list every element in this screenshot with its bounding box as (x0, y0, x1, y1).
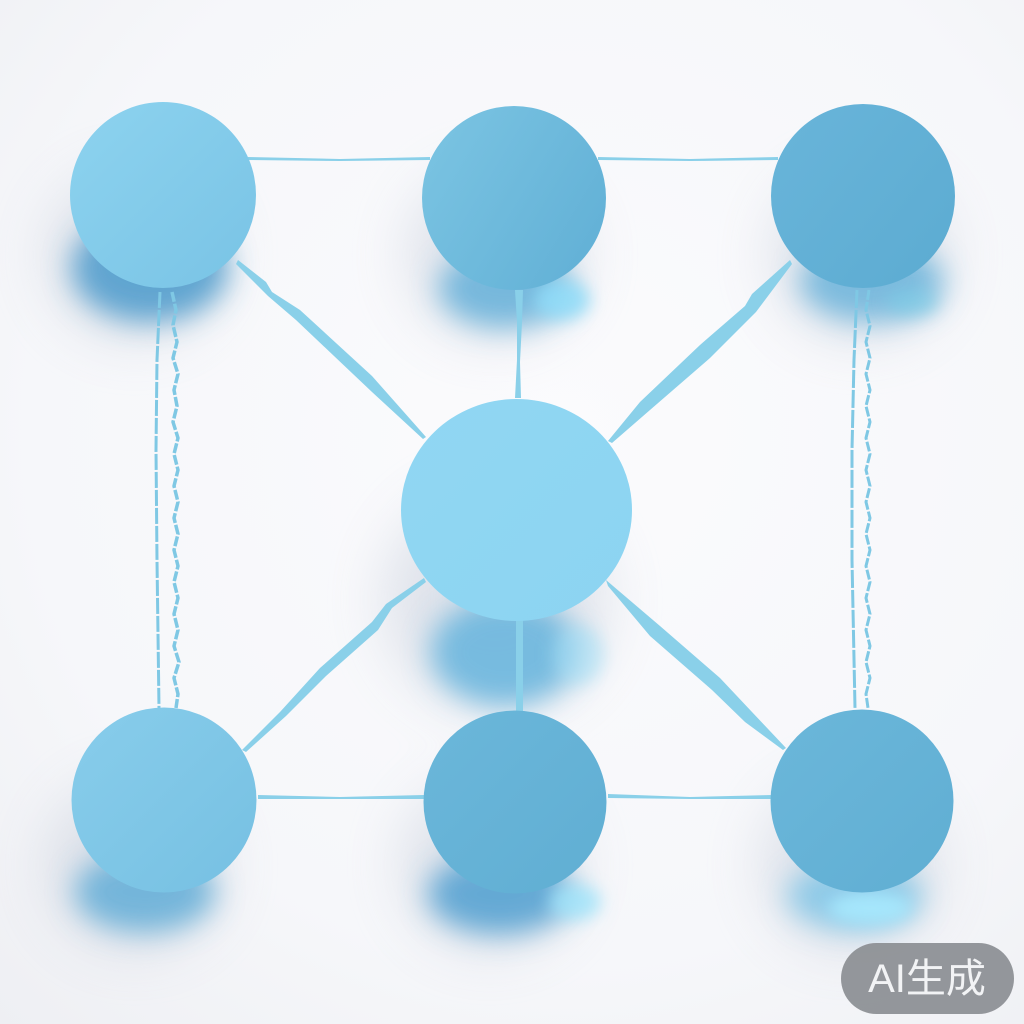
line: top middle to top right (598, 157, 778, 161)
line: right inner dashed (852, 290, 857, 708)
node: top right (771, 104, 955, 288)
line: left outer zigzag (172, 292, 179, 708)
connector lines (236, 157, 792, 799)
line: top middle to centre (515, 290, 523, 398)
line: bottom left to bottom middle (258, 795, 424, 799)
line: top left to centre (236, 260, 426, 439)
node: bottom left (72, 708, 256, 892)
line: centre to bottom middle (516, 620, 523, 712)
line: bottom left to centre (242, 578, 426, 752)
badge: AI generated (841, 943, 1014, 1014)
node: bottom middle (424, 710, 606, 894)
line: left inner dashed (156, 292, 160, 708)
line: bottom middle to bottom right (608, 794, 772, 799)
node: bottom right (770, 710, 954, 892)
line: top left to top middle (248, 157, 430, 161)
soft shadows (47, 170, 948, 950)
line: bottom right to centre (606, 580, 786, 750)
line: top right to centre (608, 260, 792, 443)
node: centre (401, 399, 632, 621)
badge: AI generated: AI生成 (868, 957, 986, 1001)
line: right outer zigzag (866, 290, 870, 708)
node: top left (70, 102, 256, 288)
node: top middle (422, 106, 606, 290)
